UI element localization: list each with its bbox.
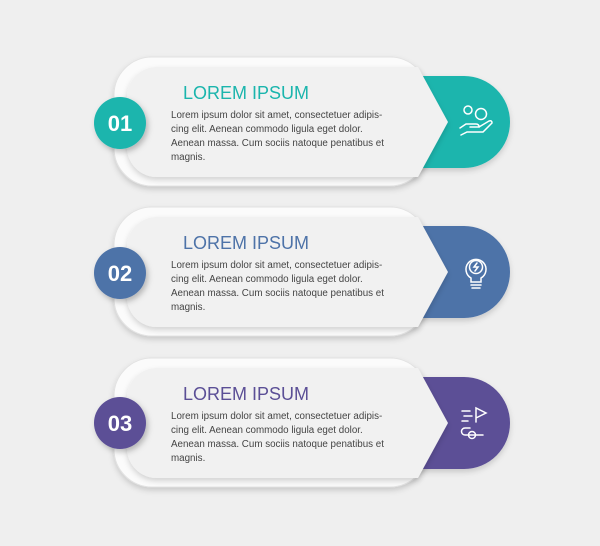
body text 02: magnis. <box>171 302 205 313</box>
body text 01: Lorem ipsum dolor sit amet, consectetuer adipis- <box>171 110 382 121</box>
icon: hand with coins <box>460 106 492 135</box>
number badge 03 <box>94 397 146 449</box>
outer frame 02 <box>114 207 428 336</box>
heading 02: LOREM IPSUM <box>183 233 309 253</box>
body text 03 <box>171 411 384 464</box>
body text 02: cing elit. Aenean commodo ligula eget dolor. <box>171 274 363 285</box>
body text 03: cing elit. Aenean commodo ligula eget dolor. <box>171 425 363 436</box>
outer frame 03 <box>114 358 428 487</box>
panel: step 02 <box>94 207 510 336</box>
number badge 02 <box>94 247 146 299</box>
panel: step 03 <box>94 358 510 487</box>
inner card 02 <box>127 217 448 327</box>
number badge 01 <box>94 97 146 149</box>
number badge 01: 01 <box>108 111 132 136</box>
body text 03: magnis. <box>171 453 205 464</box>
panel: step 01 <box>94 57 510 186</box>
body text 02: Lorem ipsum dolor sit amet, consectetuer adipis- <box>171 260 382 271</box>
colored tab 02 <box>415 226 510 318</box>
icon: light bulb <box>466 259 486 288</box>
heading 01: LOREM IPSUM <box>183 83 309 103</box>
body text 01: magnis. <box>171 152 205 163</box>
inner card 01 <box>127 67 448 177</box>
number badge 02: 02 <box>108 261 132 286</box>
inner card 03 <box>127 368 448 478</box>
colored tab 01 <box>415 76 510 168</box>
body text 01: cing elit. Aenean commodo ligula eget dolor. <box>171 124 363 135</box>
colored tab 03 <box>415 377 510 469</box>
number badge 03: 03 <box>108 411 132 436</box>
body text 01: Aenean massa. Cum sociis natoque penatibus et <box>171 138 384 149</box>
body text 03: Lorem ipsum dolor sit amet, consectetuer adipis- <box>171 411 382 422</box>
body text 02 <box>171 260 384 313</box>
heading 03: LOREM IPSUM <box>183 384 309 404</box>
body text 01 <box>171 110 384 163</box>
body text 03: Aenean massa. Cum sociis natoque penatibus et <box>171 439 384 450</box>
icon: flag with path <box>462 408 486 438</box>
body text 02: Aenean massa. Cum sociis natoque penatibus et <box>171 288 384 299</box>
outer frame 01 <box>114 57 428 186</box>
